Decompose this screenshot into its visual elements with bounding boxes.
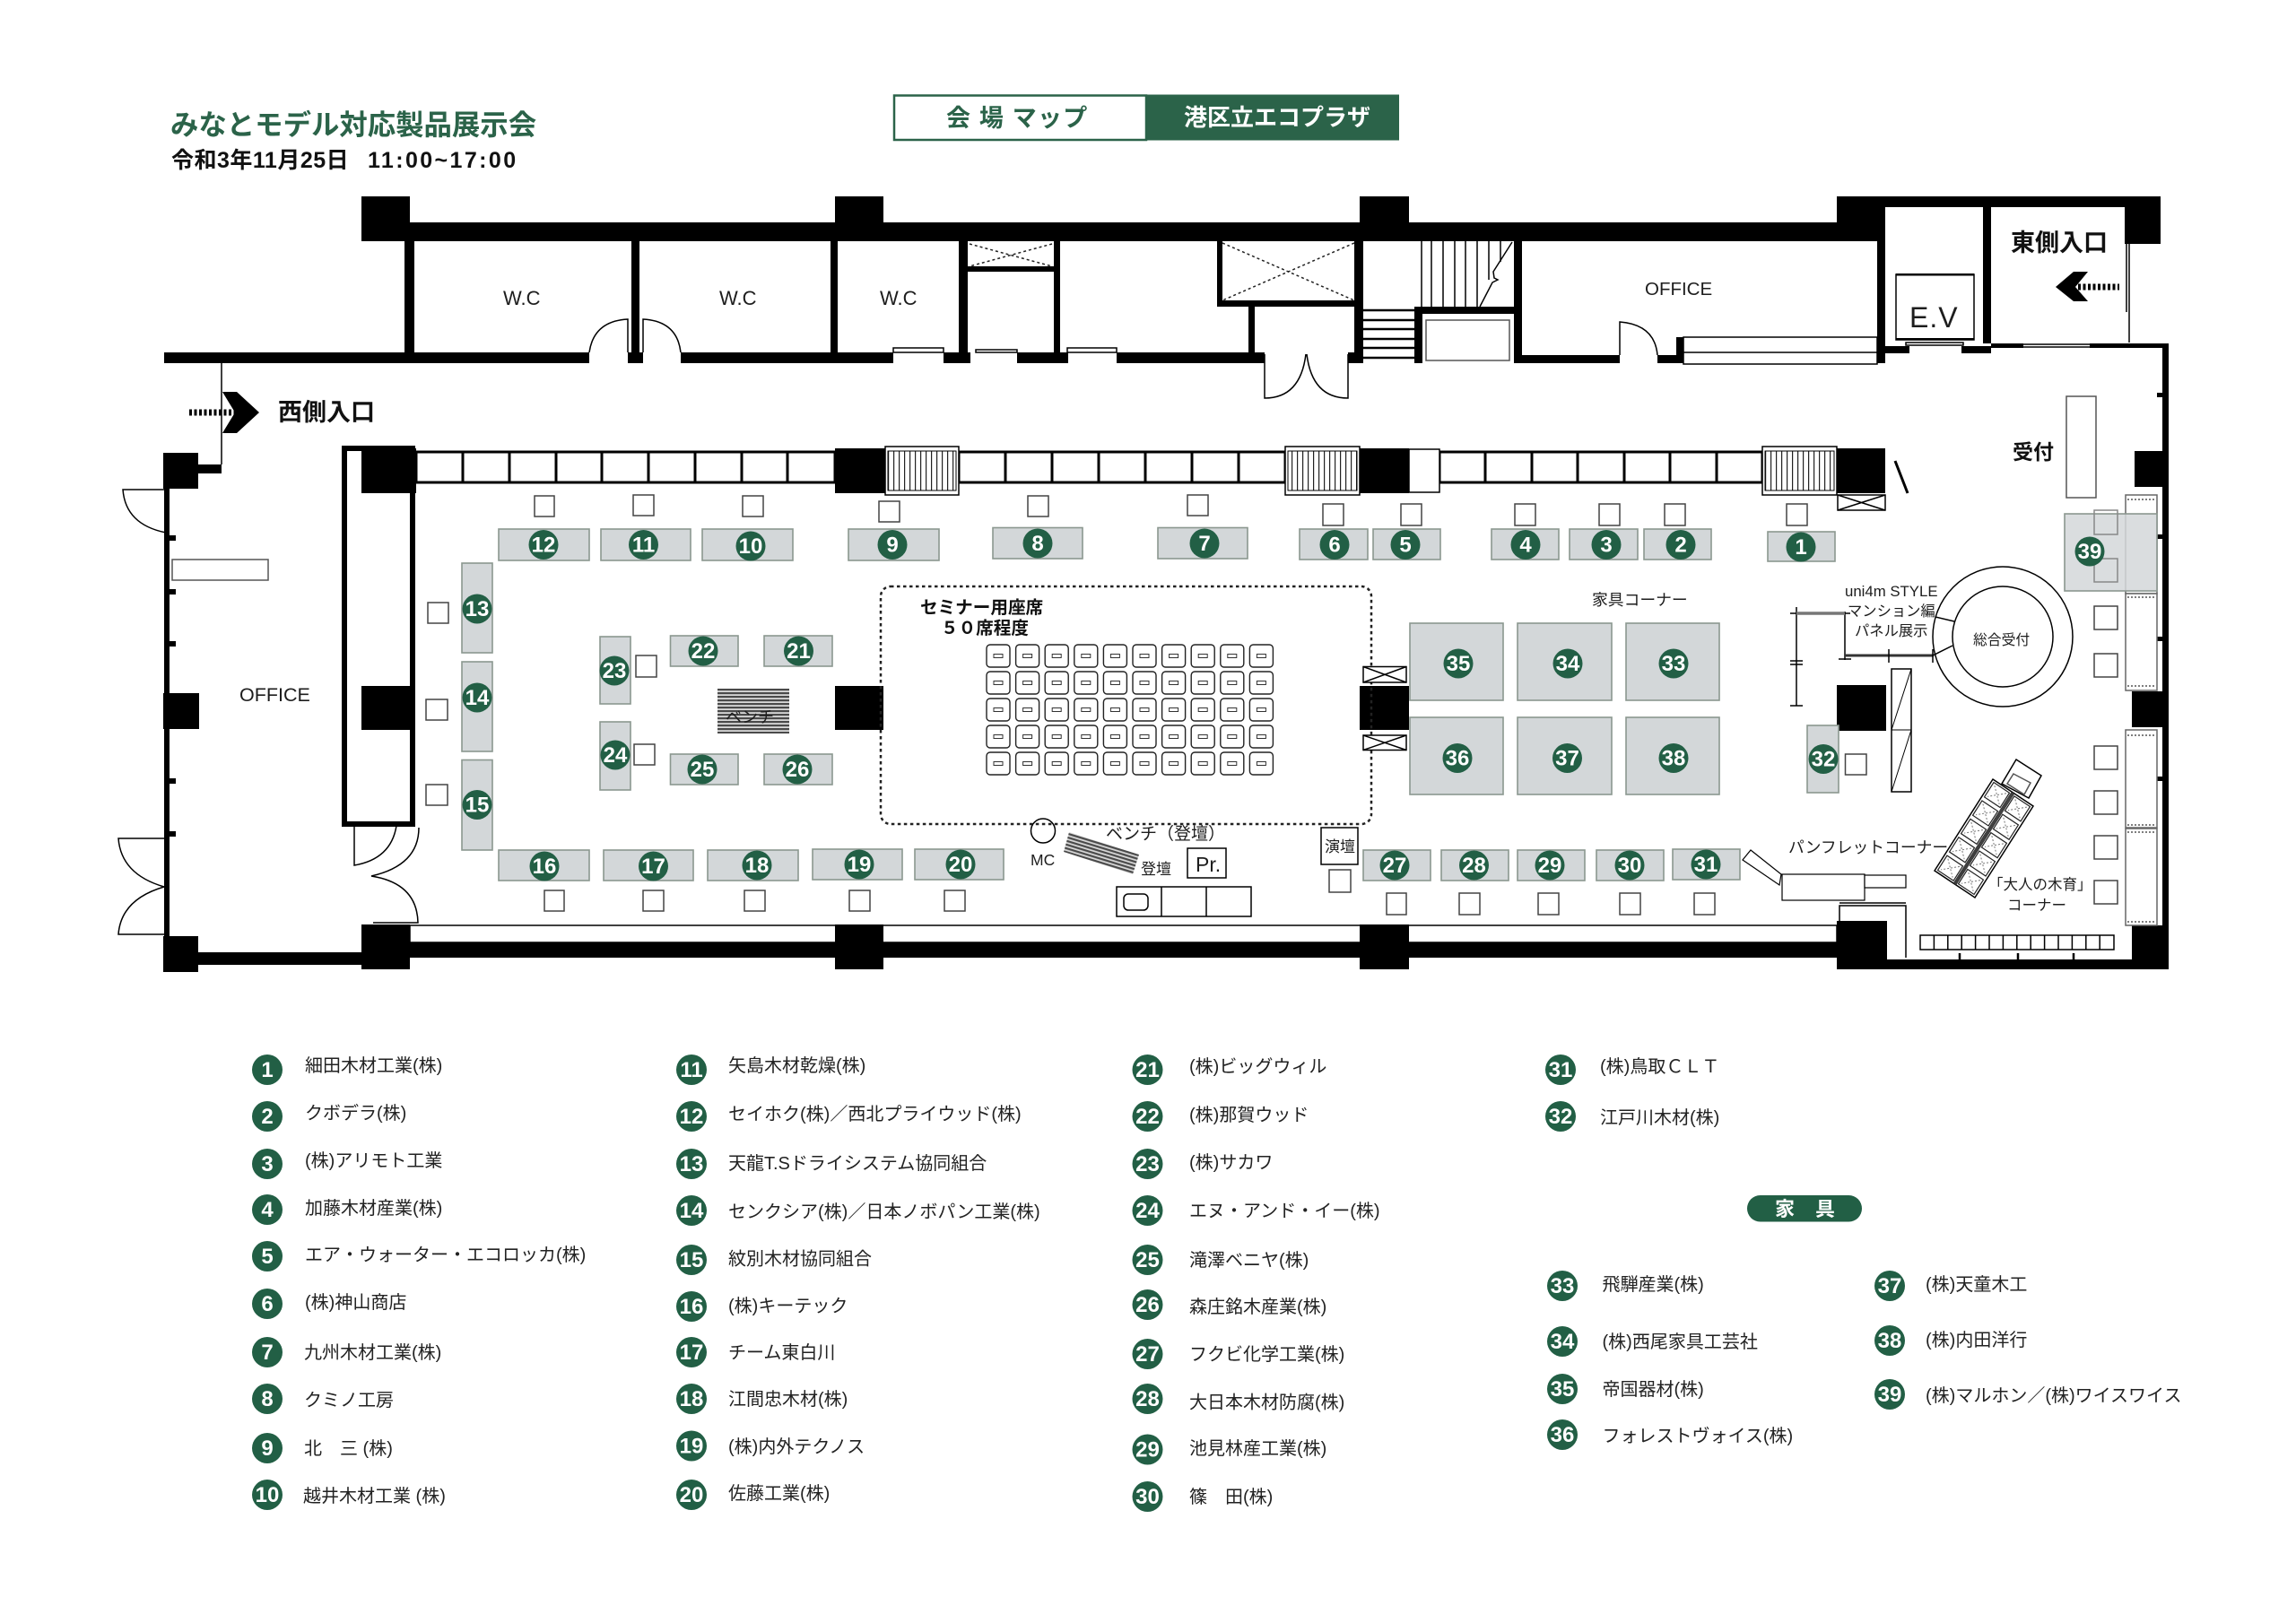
legend column 1: クミノ工房 [304, 1390, 394, 1410]
legend column 1: 9 [261, 1436, 274, 1461]
booth 30 [1596, 850, 1664, 915]
reception label: 受付 [2013, 440, 2054, 464]
legend column 2: センクシア(株)／日本ノボパン工業(株) [728, 1202, 1040, 1222]
legend column 2: 15 [680, 1248, 703, 1272]
pamphlet corner: パンフレットコーナー [1788, 838, 1948, 856]
legend furniture column 1: 36 [1551, 1423, 1574, 1447]
title: みなとモデル対応製品展示会 [170, 108, 536, 141]
legend column 1: 5 [261, 1245, 274, 1269]
bench centre: ベンチ [726, 708, 774, 726]
booth 23: 23 [603, 659, 626, 683]
legend column 3: 26 [1135, 1293, 1160, 1317]
doors [118, 244, 2129, 934]
booth 7 [1158, 495, 1248, 559]
booth 3 [1570, 504, 1638, 560]
legend column 2: 20 [680, 1483, 703, 1507]
booth 1: 1 [1795, 535, 1807, 560]
restroom labels: W.C [503, 287, 541, 309]
booth 32 [1807, 725, 1866, 793]
right side shelves [2126, 495, 2157, 925]
booth 5 [1373, 504, 1440, 560]
stage area: 演壇 [1325, 838, 1355, 855]
legend column 1: クボデラ(株) [305, 1103, 406, 1124]
booth 28 [1441, 850, 1509, 915]
booth 19: 19 [848, 853, 871, 877]
stage area: 登壇 [1141, 861, 1171, 878]
legend column 2: 13 [680, 1152, 703, 1176]
legend furniture column 2: (株)マルホン／(株)ワイスワイス [1926, 1385, 2181, 1406]
elevator: E.V [1909, 301, 1959, 334]
booth 13 [428, 563, 492, 653]
legend furniture column 1: フォレストヴォイス(株) [1602, 1426, 1793, 1446]
legend column 1: (株)アリモト工業 [305, 1150, 442, 1171]
booth 22 [671, 636, 738, 666]
header badge: venue map: 会 場 マップ [946, 105, 1088, 132]
legend column 1: 九州木材工業(株) [304, 1342, 441, 1363]
panel display: パネル展示 [1855, 623, 1927, 639]
legend column 4: (株)鳥取ＣＬＴ [1600, 1056, 1719, 1077]
legend column 3: 池見林産工業(株) [1189, 1438, 1326, 1459]
booth 22: 22 [691, 639, 715, 664]
booth 28: 28 [1462, 854, 1486, 878]
legend column 4: 31 [1549, 1058, 1572, 1082]
partition panels [1892, 669, 1911, 792]
legend column 3: 27 [1135, 1342, 1160, 1367]
wall panels [416, 449, 1762, 492]
booth 18: 18 [745, 854, 769, 878]
restroom labels: W.C [880, 287, 918, 309]
legend column 2: セイホク(株)／西北プライウッド(株) [728, 1104, 1022, 1124]
booth 26: 26 [786, 758, 809, 782]
booth 8: 8 [1031, 532, 1044, 556]
booth 27: 27 [1383, 854, 1406, 878]
booth 2 [1644, 504, 1711, 560]
booth 32: 32 [1812, 748, 1835, 771]
booth 37 [1518, 717, 1612, 794]
outer walls and columns [163, 196, 2169, 972]
legend column 4: 江戸川木材(株) [1600, 1107, 1719, 1128]
booth 33 [1626, 623, 1719, 700]
corner wall detail [1839, 903, 2114, 960]
booth 10 [702, 496, 793, 561]
legend column 1: 北 三 (株) [304, 1438, 393, 1459]
legend column 1: 越井木材工業 (株) [303, 1486, 446, 1506]
legend column 2: 18 [680, 1387, 703, 1411]
legend column 1: 7 [261, 1341, 274, 1365]
booth 20 [915, 849, 1004, 911]
booth 4 [1492, 504, 1559, 560]
office label top: OFFICE [1645, 279, 1712, 299]
stairs [1363, 241, 1512, 360]
furniture corner label: 家具コーナー [1592, 591, 1688, 609]
furniture pill heading: 家 [1775, 1198, 1795, 1220]
legend column 2: 天龍T.Sドライシステム協同組合 [728, 1153, 987, 1174]
header badge: venue map [894, 95, 1146, 140]
booth 2: 2 [1674, 533, 1687, 558]
legend column 3: エヌ・アンド・イー(株) [1189, 1201, 1380, 1221]
panel display [1790, 583, 1954, 706]
stage area: ベンチ（登壇） [1106, 824, 1225, 844]
legend column 1: 2 [261, 1105, 274, 1129]
general reception [1933, 567, 2073, 707]
booth 16: 16 [533, 855, 556, 879]
booth 21 [764, 636, 832, 666]
stage area [1031, 819, 1358, 916]
booth 11 [601, 495, 691, 560]
booth 14 [426, 662, 492, 751]
booth 6 [1300, 504, 1368, 560]
legend column 3: 篠 田(株) [1189, 1487, 1273, 1507]
booth 9: 9 [886, 533, 899, 558]
booth 36: 36 [1446, 746, 1469, 771]
booth 31 [1673, 849, 1740, 915]
legend column 2: 江間忠木材(株) [728, 1389, 848, 1410]
booth 14: 14 [465, 686, 490, 710]
legend column 1: (株)神山商店 [305, 1292, 406, 1313]
wood education corner [1935, 759, 2092, 914]
legend column 3: 大日本木材防腐(株) [1189, 1392, 1344, 1413]
legend column 3: 21 [1135, 1058, 1160, 1082]
legend column 1 [252, 1055, 586, 1510]
booth 7: 7 [1198, 532, 1211, 556]
legend column 2 [676, 1055, 1040, 1510]
legend column 2: チーム東白川 [728, 1342, 835, 1363]
legend column 3: (株)サカワ [1189, 1152, 1273, 1173]
restroom labels: W.C [719, 287, 757, 309]
furniture pill heading: 具 [1815, 1198, 1835, 1220]
booth 37: 37 [1555, 746, 1579, 771]
panel display: uni4m STYLE [1845, 583, 1938, 600]
booth 17: 17 [641, 855, 665, 879]
legend furniture column 2 [1874, 1271, 2181, 1410]
booth 16 [499, 850, 589, 911]
legend column 3: 森庄銘木産業(株) [1189, 1297, 1326, 1317]
booth 27 [1363, 850, 1431, 915]
elevator [1896, 273, 1974, 345]
legend furniture column 2: 37 [1878, 1274, 1901, 1298]
legend furniture column 2: 38 [1878, 1329, 1901, 1353]
seminar area [881, 586, 1371, 824]
booth 10: 10 [739, 534, 762, 559]
legend furniture column 1 [1547, 1271, 1793, 1450]
legend column 2: 11 [680, 1058, 703, 1082]
legend column 1: 4 [261, 1198, 274, 1222]
legend furniture column 1: 34 [1551, 1330, 1575, 1354]
booth 24: 24 [604, 743, 628, 768]
arrow: east entrance [2056, 272, 2119, 301]
booth 1 [1768, 504, 1835, 561]
wood education corner: コーナー [2007, 898, 2066, 914]
booth 11: 11 [632, 533, 655, 558]
date and time: 令和3年11月25日 [171, 148, 349, 173]
legend furniture column 2: (株)内田洋行 [1926, 1330, 2027, 1350]
header badge: venue name: 港区立エコプラザ [1184, 104, 1370, 131]
booth 15: 15 [465, 793, 489, 818]
booth 38: 38 [1662, 746, 1685, 771]
legend column 1: 加藤木材産業(株) [305, 1198, 442, 1219]
legend column 4: 32 [1549, 1105, 1572, 1129]
legend column 3: (株)ビッグウィル [1189, 1056, 1326, 1077]
booth 36 [1410, 717, 1503, 794]
legend column 3: 29 [1135, 1438, 1160, 1462]
booth 26 [764, 754, 832, 785]
legend column 1: 1 [261, 1058, 274, 1082]
legend furniture column 1: 帝国器材(株) [1602, 1379, 1704, 1400]
reception counter [2066, 396, 2096, 498]
booth 38 [1626, 717, 1719, 794]
wood education corner: 「大人の木育」 [1988, 876, 2092, 893]
legend column 1: 細田木材工業(株) [305, 1055, 442, 1076]
header badge: venue name [1146, 95, 1399, 140]
legend column 3: 22 [1135, 1105, 1160, 1129]
legend column 2: 12 [680, 1105, 703, 1129]
legend column 2: 17 [680, 1341, 703, 1365]
legend column 1: エア・ウォーター・エコロッカ(株) [305, 1245, 586, 1265]
stage area: Pr. [1196, 853, 1221, 876]
seminar label: ５０席程度 [941, 619, 1029, 638]
booth 12: 12 [532, 533, 555, 558]
booth 12 [499, 496, 589, 560]
booth 39: 39 [2078, 540, 2101, 564]
panel display: マンション編 [1848, 603, 1935, 620]
legend column 3: 28 [1135, 1387, 1160, 1411]
booth 34 [1518, 623, 1612, 700]
legend column 1: 6 [261, 1292, 274, 1316]
legend column 1: 8 [261, 1387, 274, 1411]
legend column 4 [1545, 1055, 1719, 1132]
legend column 2: 19 [680, 1435, 703, 1458]
booth 9 [848, 501, 939, 560]
legend column 3: 30 [1135, 1485, 1160, 1509]
cross boxes by column [1363, 667, 1406, 750]
legend column 3: フクビ化学工業(株) [1189, 1344, 1344, 1365]
legend column 3: 25 [1135, 1248, 1160, 1272]
legend furniture column 1: 飛騨産業(株) [1602, 1274, 1704, 1295]
booth 39 [2065, 510, 2157, 591]
booth 6: 6 [1328, 533, 1341, 558]
legend column 2: 紋別木材協同組合 [728, 1248, 872, 1270]
booth 30: 30 [1618, 854, 1641, 878]
office counter [172, 560, 268, 580]
booth 19 [813, 849, 902, 911]
legend column 3: 滝澤ベニヤ(株) [1189, 1250, 1309, 1271]
booth 4: 4 [1519, 533, 1532, 558]
general reception: 総合受付 [1973, 632, 2030, 648]
booth 25 [671, 754, 738, 785]
legend column 3: 23 [1135, 1152, 1160, 1176]
booth 21: 21 [787, 639, 811, 664]
legend column 2: (株)キーテック [728, 1296, 848, 1316]
booth 23 [599, 637, 657, 704]
seminar label: セミナー用座席 [920, 598, 1043, 618]
legend column 2: 佐藤工業(株) [728, 1483, 830, 1504]
legend column 1: 3 [261, 1152, 274, 1176]
booth 24 [600, 722, 655, 790]
furniture pill heading [1747, 1195, 1862, 1221]
booth 29 [1518, 850, 1585, 915]
booth 20: 20 [949, 853, 972, 877]
booth 33: 33 [1662, 652, 1685, 676]
booth 5: 5 [1399, 533, 1412, 558]
office label west: OFFICE [239, 684, 310, 706]
booth 34: 34 [1556, 652, 1580, 676]
booth 17 [604, 850, 693, 911]
booth 25: 25 [691, 758, 714, 782]
booth 18 [708, 850, 798, 911]
booth 8 [993, 496, 1083, 559]
booth 35: 35 [1447, 652, 1470, 676]
bench centre [718, 689, 789, 733]
shaft boxes [970, 243, 1354, 300]
legend furniture column 1: 33 [1551, 1274, 1574, 1298]
legend furniture column 1: (株)西尾家具工芸社 [1602, 1332, 1758, 1352]
booth 3: 3 [1600, 533, 1613, 558]
restroom labels [503, 287, 918, 309]
exhibitor legend [252, 1055, 2181, 1512]
legend column 3: (株)那賀ウッド [1189, 1105, 1309, 1125]
legend column 2: 14 [680, 1199, 704, 1223]
legend column 3 [1132, 1055, 1380, 1512]
booth 31: 31 [1694, 853, 1718, 877]
stage area: MC [1031, 851, 1055, 869]
ventilation grilles [885, 447, 1908, 510]
legend furniture column 2: 39 [1878, 1383, 1901, 1407]
arrow: west entrance [189, 392, 259, 433]
east entrance label: 東側入口 [2011, 230, 2108, 256]
legend column 2: 16 [680, 1295, 703, 1319]
floor plan [118, 196, 2169, 972]
booth 13: 13 [465, 597, 489, 621]
seats [987, 645, 1273, 775]
legend column 1: 10 [256, 1483, 279, 1507]
legend furniture column 1: 35 [1551, 1377, 1574, 1402]
legend column 2: (株)内外テクノス [728, 1436, 865, 1457]
booth 35 [1410, 623, 1503, 700]
legend column 3: 24 [1135, 1199, 1160, 1223]
booth 29: 29 [1538, 854, 1561, 878]
booth 15 [426, 760, 492, 850]
legend column 2: 矢島木材乾燥(株) [728, 1055, 865, 1076]
pamphlet corner [1743, 838, 1948, 900]
date and time: 11:00~17:00 [368, 148, 518, 173]
west entrance label: 西側入口 [278, 399, 375, 426]
legend furniture column 2: (株)天童木工 [1926, 1274, 2027, 1295]
right side chairs [2094, 606, 2118, 904]
